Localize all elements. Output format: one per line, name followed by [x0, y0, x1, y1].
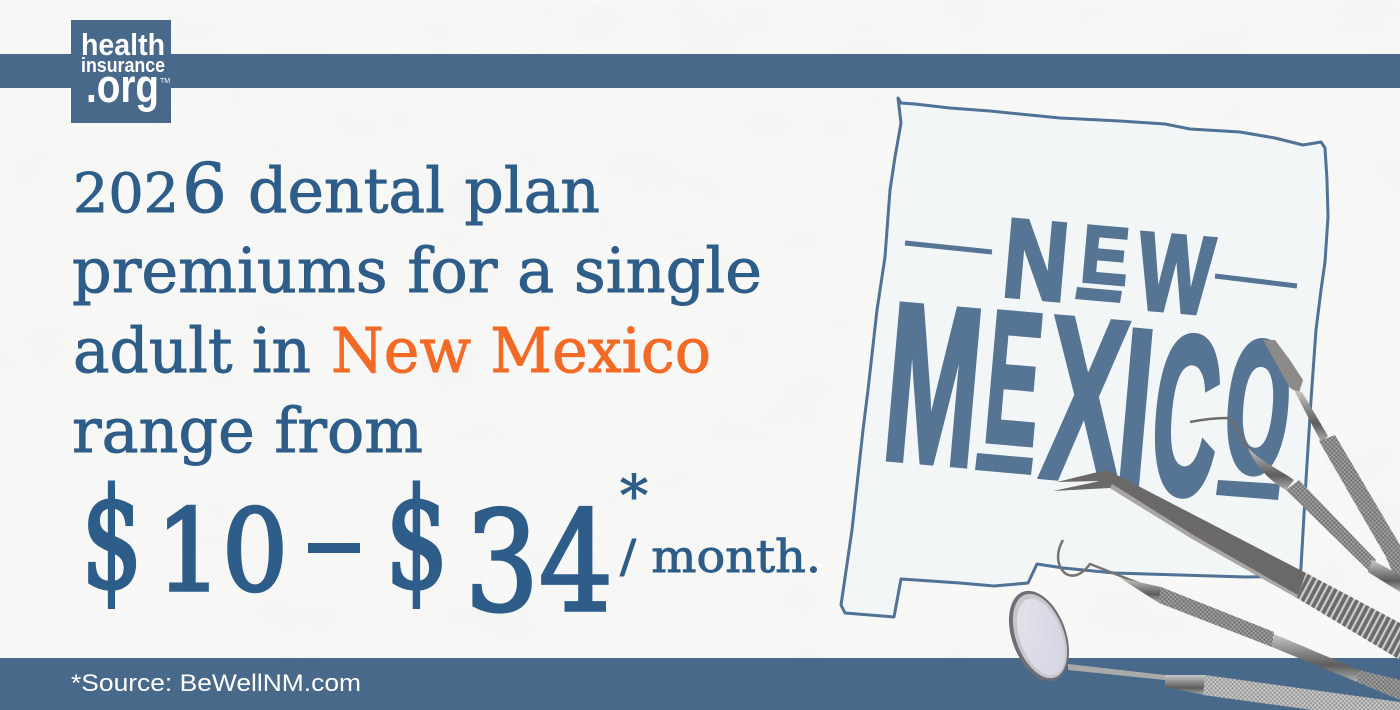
state label: NEW: E: [1077, 209, 1133, 303]
logo: healthinsurance.org: TM: [160, 78, 170, 85]
top band: [0, 54, 1400, 88]
dental instruments: [998, 340, 1400, 710]
line 3: [73, 314, 711, 387]
price range: $: [81, 459, 143, 620]
line 1: 202: [73, 162, 179, 225]
line 1: [73, 150, 600, 229]
instrument: spatula: [1263, 340, 1400, 590]
state label: MEXICO: X: [1034, 265, 1138, 534]
logo: healthinsurance.org: .org: [86, 59, 159, 112]
state label: NEW: N: [999, 197, 1073, 325]
source note: *Source: BeWellNM.com: [71, 670, 361, 697]
bottom band: [0, 658, 1400, 710]
line 3: adult in: [73, 314, 311, 387]
price range: 34: [465, 482, 613, 643]
instrument: tweezers: [1053, 470, 1400, 660]
state label: MEXICO: E: [977, 270, 1050, 486]
state label: MEXICO: C: [1143, 289, 1229, 544]
line 4: range from: [72, 394, 423, 467]
state label: MEXICO: M: [876, 255, 991, 514]
per month: / month.: [620, 530, 821, 583]
New Mexico state outline: [841, 98, 1328, 617]
title text: [72, 150, 762, 467]
line 1: dental plan: [248, 154, 600, 227]
state label: MEXICO: I: [1108, 282, 1164, 534]
logo: healthinsurance.org: health: [81, 27, 165, 62]
asterisk: *: [620, 464, 648, 529]
line 3: New Mexico: [331, 314, 711, 387]
logo: healthinsurance.org: insurance: [81, 55, 165, 77]
state label: NEW: [905, 197, 1297, 339]
price range: 10: [156, 487, 288, 617]
instrument: dental mirror: [998, 583, 1400, 710]
instrument: hooked explorer: [1058, 540, 1400, 700]
state label: MEXICO: O: [1218, 303, 1299, 513]
price range: [81, 459, 613, 643]
price range: $: [385, 459, 449, 620]
instrument: sickle probe: [1190, 418, 1400, 592]
line 1: 6: [182, 150, 227, 229]
state label: MEXICO: [876, 255, 1299, 544]
line 2: premiums for a single: [72, 234, 762, 307]
logo: healthinsurance.org: [71, 20, 171, 123]
state label: NEW: W: [1133, 210, 1219, 339]
